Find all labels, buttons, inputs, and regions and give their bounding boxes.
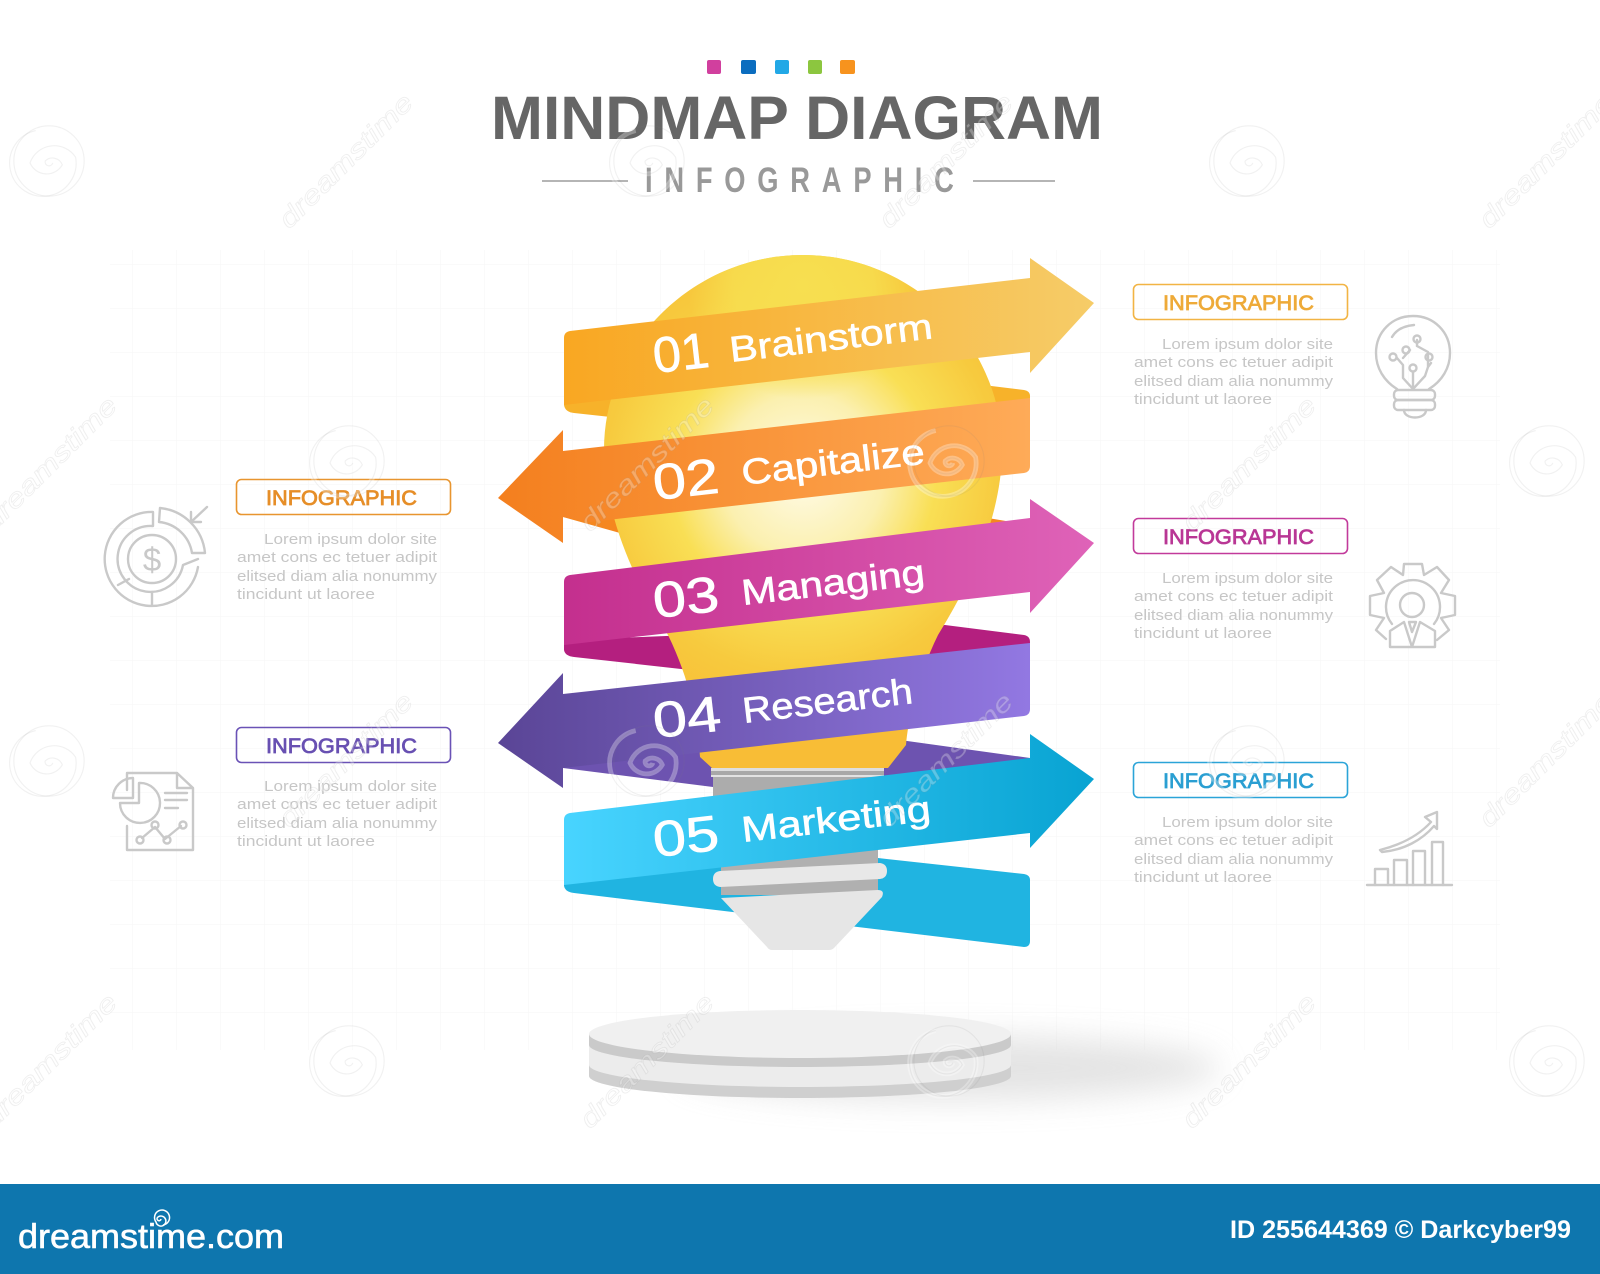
band 4: Research xyxy=(498,643,1030,788)
band 3: Managing: 03 xyxy=(650,566,722,629)
panel: right item 3: tincidunt ut laoree xyxy=(1134,869,1272,886)
title block xyxy=(491,60,1103,200)
band 3: Managing: Managing xyxy=(739,551,927,613)
watermark: dreamstime xyxy=(272,87,419,234)
panel: right item 2: INFOGRAPHIC xyxy=(1163,525,1314,549)
watermark: dreamstime xyxy=(573,390,720,537)
bulb neck xyxy=(711,768,884,895)
watermark: dreamstime xyxy=(272,686,419,833)
panel: left item 1: INFOGRAPHIC xyxy=(266,486,417,510)
icon: report document xyxy=(113,773,193,850)
fold: band 4 xyxy=(563,740,1030,830)
panel: right item 1: Lorem ipsum dolor site xyxy=(1162,336,1333,353)
fold: band 2 xyxy=(563,505,1030,585)
icon: circuit light bulb xyxy=(1376,316,1450,418)
footer credit: ID 255644369 © Darkcyber99 xyxy=(1230,1216,1571,1244)
watermark: dreamstime xyxy=(872,87,1019,234)
panel: right item 3: Lorem ipsum dolor site xyxy=(1162,814,1333,831)
dollar sign: $ xyxy=(143,541,161,578)
panel: left item 2: INFOGRAPHIC xyxy=(266,734,417,758)
band 1: Brainstorm: 01 xyxy=(650,322,712,384)
panel: right item 1: elitsed diam alia nonummy xyxy=(1134,373,1334,390)
bulb screw cap xyxy=(713,863,887,950)
panel: left item 1: elitsed diam alia nonummy xyxy=(237,568,438,585)
panel: left item 1: tincidunt ut laoree xyxy=(237,586,375,603)
footer logo: dreamstime.com xyxy=(18,1218,284,1256)
band 5: Marketing: Marketing xyxy=(739,788,933,850)
watermark: dreamstime xyxy=(573,987,720,1134)
panel: right item 2: Lorem ipsum dolor site xyxy=(1162,570,1333,587)
panel: right item 2: amet cons ec tetuer adipit xyxy=(1134,588,1334,605)
band 1: Brainstorm: Brainstorm xyxy=(727,305,935,370)
back folds of ribbons xyxy=(563,384,1030,947)
panel: left item 1 xyxy=(236,480,450,603)
icon: gear with person xyxy=(1370,564,1455,647)
watermark: dreamstime xyxy=(1175,390,1322,537)
panel: left item 2: elitsed diam alia nonummy xyxy=(237,815,438,832)
colour squares xyxy=(707,60,855,74)
panel: right item 3 xyxy=(1134,762,1348,886)
footer bar xyxy=(0,1184,1600,1274)
band 5: Marketing xyxy=(564,734,1094,885)
subtitle: INFOGRAPHIC xyxy=(645,161,954,200)
panel: left item 2: amet cons ec tetuer adipit xyxy=(237,796,438,813)
main title: MINDMAP DIAGRAM xyxy=(491,84,1103,152)
band 1: Brainstorm xyxy=(564,258,1094,405)
panel: right item 2: tincidunt ut laoree xyxy=(1134,625,1272,642)
panel: left item 2 xyxy=(236,728,450,850)
watermark: dreamstime xyxy=(1472,686,1600,833)
band 5: Marketing: 05 xyxy=(650,805,722,868)
panel: right item 2 xyxy=(1134,518,1348,642)
band 3: Managing xyxy=(564,499,1094,645)
pedestal shadow xyxy=(680,1036,1220,1100)
pedestal xyxy=(589,1010,1220,1100)
band 2: Capitalize: Capitalize xyxy=(739,431,927,493)
bulb glass xyxy=(604,255,1002,768)
panel: right item 3: INFOGRAPHIC xyxy=(1163,769,1314,793)
panel: right item 1: amet cons ec tetuer adipit xyxy=(1134,354,1334,371)
panel: left item 2: Lorem ipsum dolor site xyxy=(264,778,437,795)
fold: band 1 xyxy=(564,384,1030,463)
panel: left item 1: Lorem ipsum dolor site xyxy=(264,531,437,548)
icon: growth chart xyxy=(1367,812,1452,885)
fold: band 3 xyxy=(564,625,1030,708)
watermark: dreamstime xyxy=(1472,87,1600,234)
icon: dollar target xyxy=(105,507,207,606)
panel: left item 1: amet cons ec tetuer adipit xyxy=(237,549,438,566)
panel: right item 1: INFOGRAPHIC xyxy=(1163,291,1314,315)
band 2: Capitalize xyxy=(498,398,1030,543)
light bulb xyxy=(604,255,1002,950)
band 4: Research: Research xyxy=(740,670,915,731)
panel: left item 2: tincidunt ut laoree xyxy=(237,833,375,850)
fold: band 5 xyxy=(564,858,1030,947)
watermark: dreamstime xyxy=(1175,987,1322,1134)
panel: right item 1 xyxy=(1134,284,1348,408)
panel: right item 2: elitsed diam alia nonummy xyxy=(1134,607,1334,624)
panel: right item 3: amet cons ec tetuer adipit xyxy=(1134,832,1334,849)
panel: right item 1: tincidunt ut laoree xyxy=(1134,391,1272,408)
band 4: Research: 04 xyxy=(650,686,724,749)
background grid xyxy=(110,250,1500,1050)
panel: right item 3: elitsed diam alia nonummy xyxy=(1134,851,1334,868)
band 2: Capitalize: 02 xyxy=(650,448,722,511)
watermark: dreamstime xyxy=(872,686,1019,833)
